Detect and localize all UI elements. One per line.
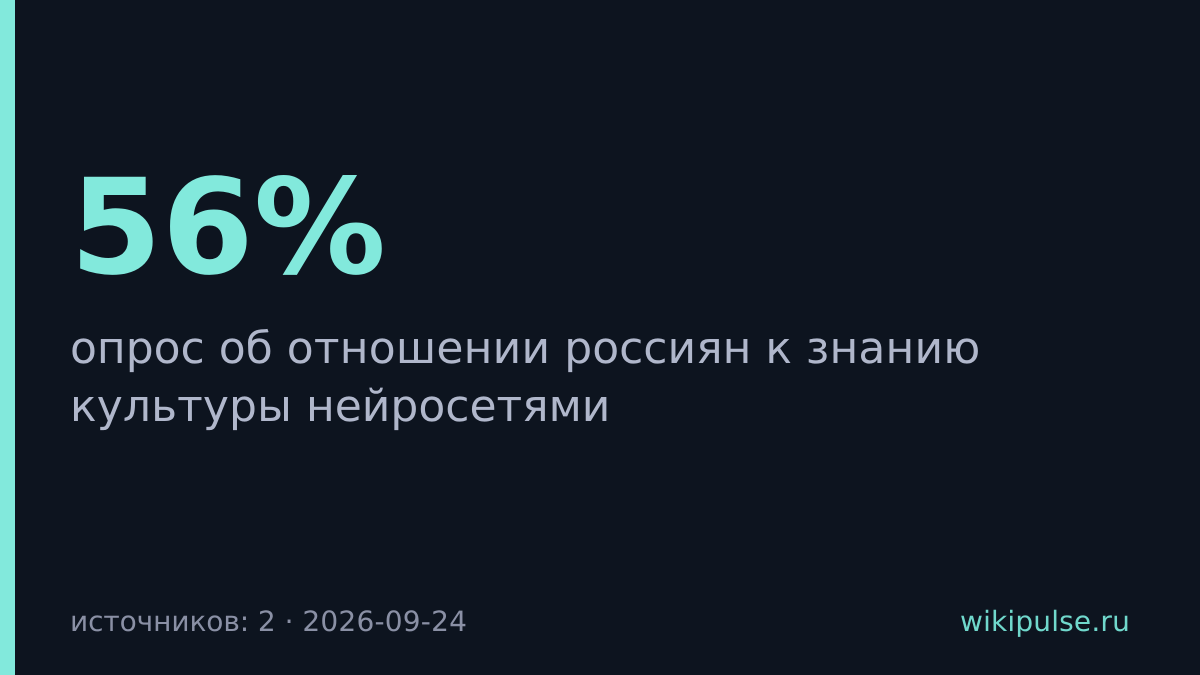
- source and date: источников: 2 · 2026-09-24: [70, 605, 467, 638]
- description: культуры нейросетями: [70, 381, 610, 432]
- big number: 56%: [70, 151, 386, 305]
- accent bar: [0, 0, 15, 675]
- description: [70, 323, 980, 432]
- site name: wikipulse.ru: [960, 605, 1130, 638]
- description: опрос об отношении россиян к знанию: [70, 323, 980, 374]
